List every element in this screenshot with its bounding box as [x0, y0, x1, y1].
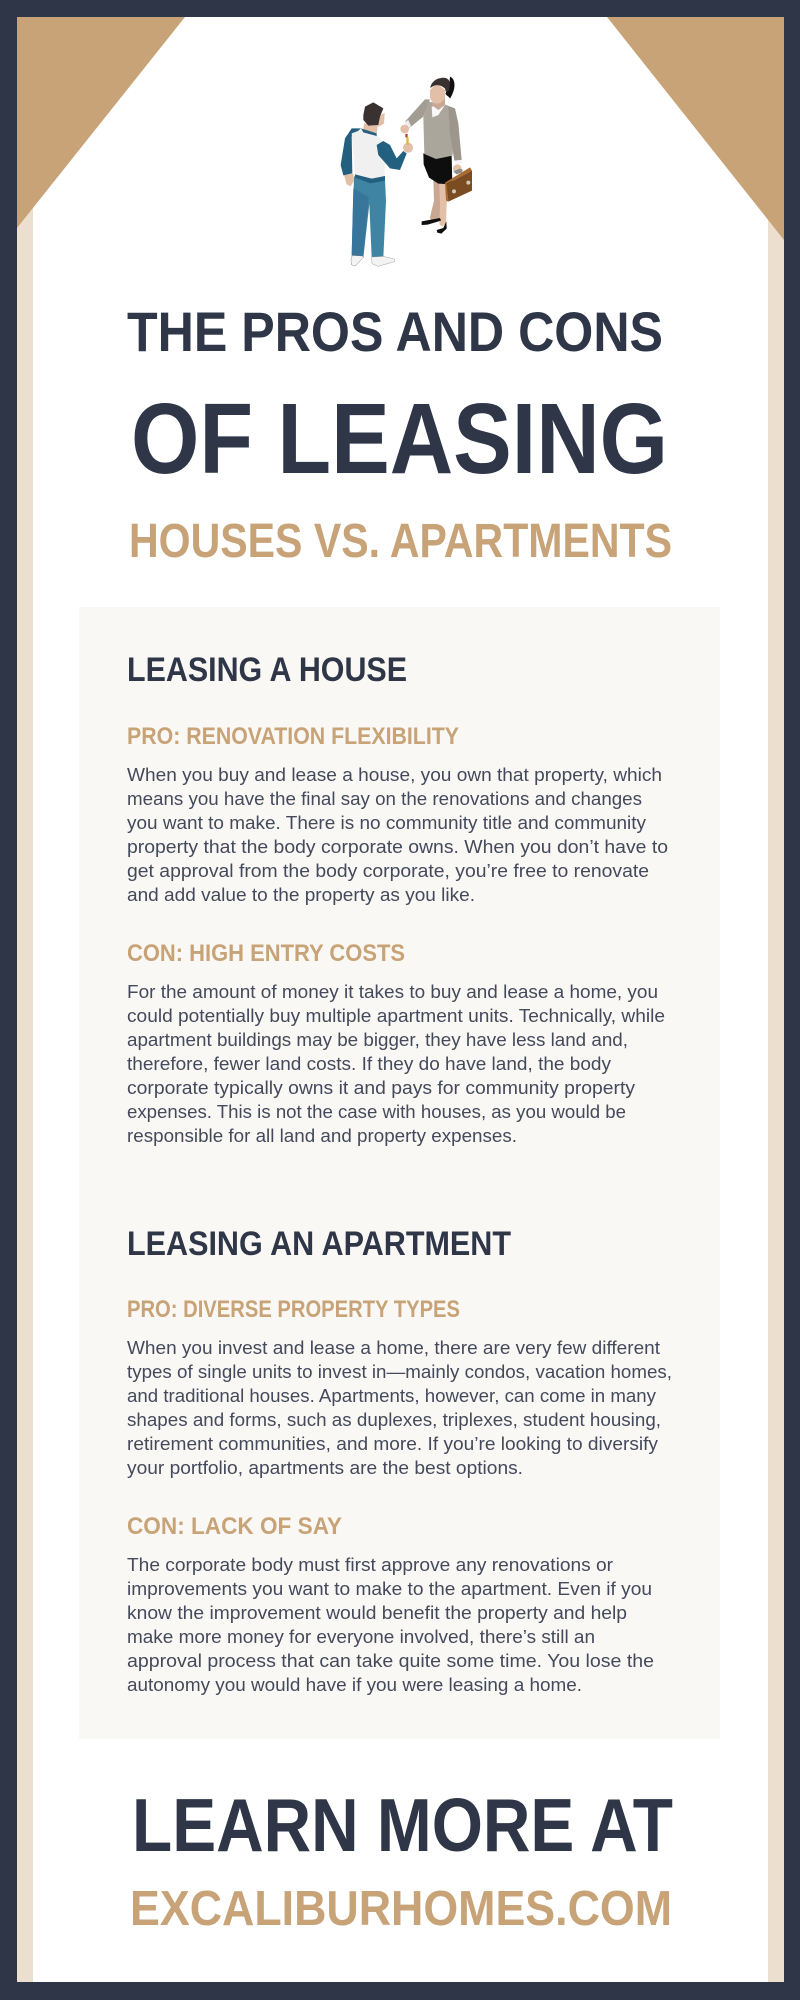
text: diverse property types body: your portfolio, apartments are the best options.	[127, 1457, 523, 1478]
text: lack of say body: improvements you want to make to the apartment. Even if you	[127, 1578, 652, 1599]
text: high entry costs body: apartment buildings may be bigger, they have less land and,	[127, 1029, 628, 1050]
text: high entry costs body: could potentially buy multiple apartment units. Technically, while	[127, 1005, 665, 1026]
text: renovation flexibility body: get approval from the body corporate, you’re free to renovate	[127, 860, 649, 881]
icon: key	[405, 134, 409, 145]
footer: website: EXCALIBURHOMES.COM	[130, 1881, 672, 1936]
subheading: con lack of say: CON: LACK OF SAY	[127, 1513, 342, 1540]
text: lack of say body: make more money for everyone involved, there’s still an	[127, 1626, 595, 1647]
figure: woman	[400, 77, 462, 234]
panel: content background	[79, 607, 720, 1739]
text: lack of say body: know the improvement would benefit the property and help	[127, 1602, 627, 1623]
title: the pros and cons: THE PROS AND CONS	[127, 300, 663, 363]
text: high entry costs body	[127, 981, 665, 1146]
heading: leasing a house: LEASING A HOUSE	[127, 651, 407, 689]
text: high entry costs body: For the amount of money it takes to buy and lease a home, you	[127, 981, 658, 1002]
figure: man	[341, 102, 413, 266]
text: diverse property types body: When you invest and lease a home, there are very few different	[127, 1337, 660, 1358]
subheading: pro diverse property types: PRO: DIVERSE PROPERTY TYPES	[127, 1296, 460, 1323]
text: diverse property types body	[127, 1337, 672, 1478]
text: renovation flexibility body: means you have the final say on the renovations and changes	[127, 788, 642, 809]
text: lack of say body: approval process that can take quite some time. You lose the	[127, 1650, 654, 1671]
corner: left tan triangle	[17, 17, 185, 228]
text: diverse property types body: shapes and forms, such as duplexes, triplexes, student housing,	[127, 1409, 661, 1430]
subheading: pro renovation flexibility: PRO: RENOVATION FLEXIBILITY	[127, 723, 459, 750]
text: lack of say body: autonomy you would have if you were leasing a home.	[127, 1674, 582, 1695]
heading: leasing an apartment: LEASING AN APARTMENT	[127, 1225, 511, 1263]
text: high entry costs body: responsible for all land and property expenses.	[127, 1125, 517, 1146]
subheading: con high entry costs: CON: HIGH ENTRY COSTS	[127, 940, 405, 967]
text: high entry costs body: therefore, fewer land costs. If they do have land, the body	[127, 1053, 612, 1074]
text: lack of say body: The corporate body must first approve any renovations or	[127, 1554, 613, 1575]
text: high entry costs body: expenses. This is not the case with houses, as you would be	[127, 1101, 626, 1122]
text: diverse property types body: retirement communities, and more. If you’re looking to diversify	[127, 1433, 659, 1454]
text: renovation flexibility body: and add value to the property as you like.	[127, 884, 475, 905]
title: of leasing: OF LEASING	[131, 383, 668, 495]
illustration: man and woman exchanging a key	[341, 77, 472, 266]
text: renovation flexibility body: property that the body corporate owns. When you don’t have to	[127, 836, 668, 857]
corner: right tan triangle	[607, 17, 784, 240]
text: diverse property types body: and traditional houses. Apartments, however, can come in many	[127, 1385, 657, 1406]
text: renovation flexibility body	[127, 764, 668, 905]
text: high entry costs body: corporate typically owns it and pays for community property	[127, 1077, 636, 1098]
text: lack of say body	[127, 1554, 654, 1695]
subtitle: houses vs. apartments: HOUSES VS. APARTMENTS	[129, 515, 672, 568]
footer: learn more at: LEARN MORE AT	[132, 1783, 673, 1867]
text: renovation flexibility body: When you buy and lease a house, you own that property, which	[127, 764, 662, 785]
text: diverse property types body: types of single units to invest in—mainly condos, vacation homes,	[127, 1361, 672, 1382]
text: renovation flexibility body: you want to make. There is no community title and community	[127, 812, 647, 833]
icon: briefcase	[445, 167, 472, 202]
